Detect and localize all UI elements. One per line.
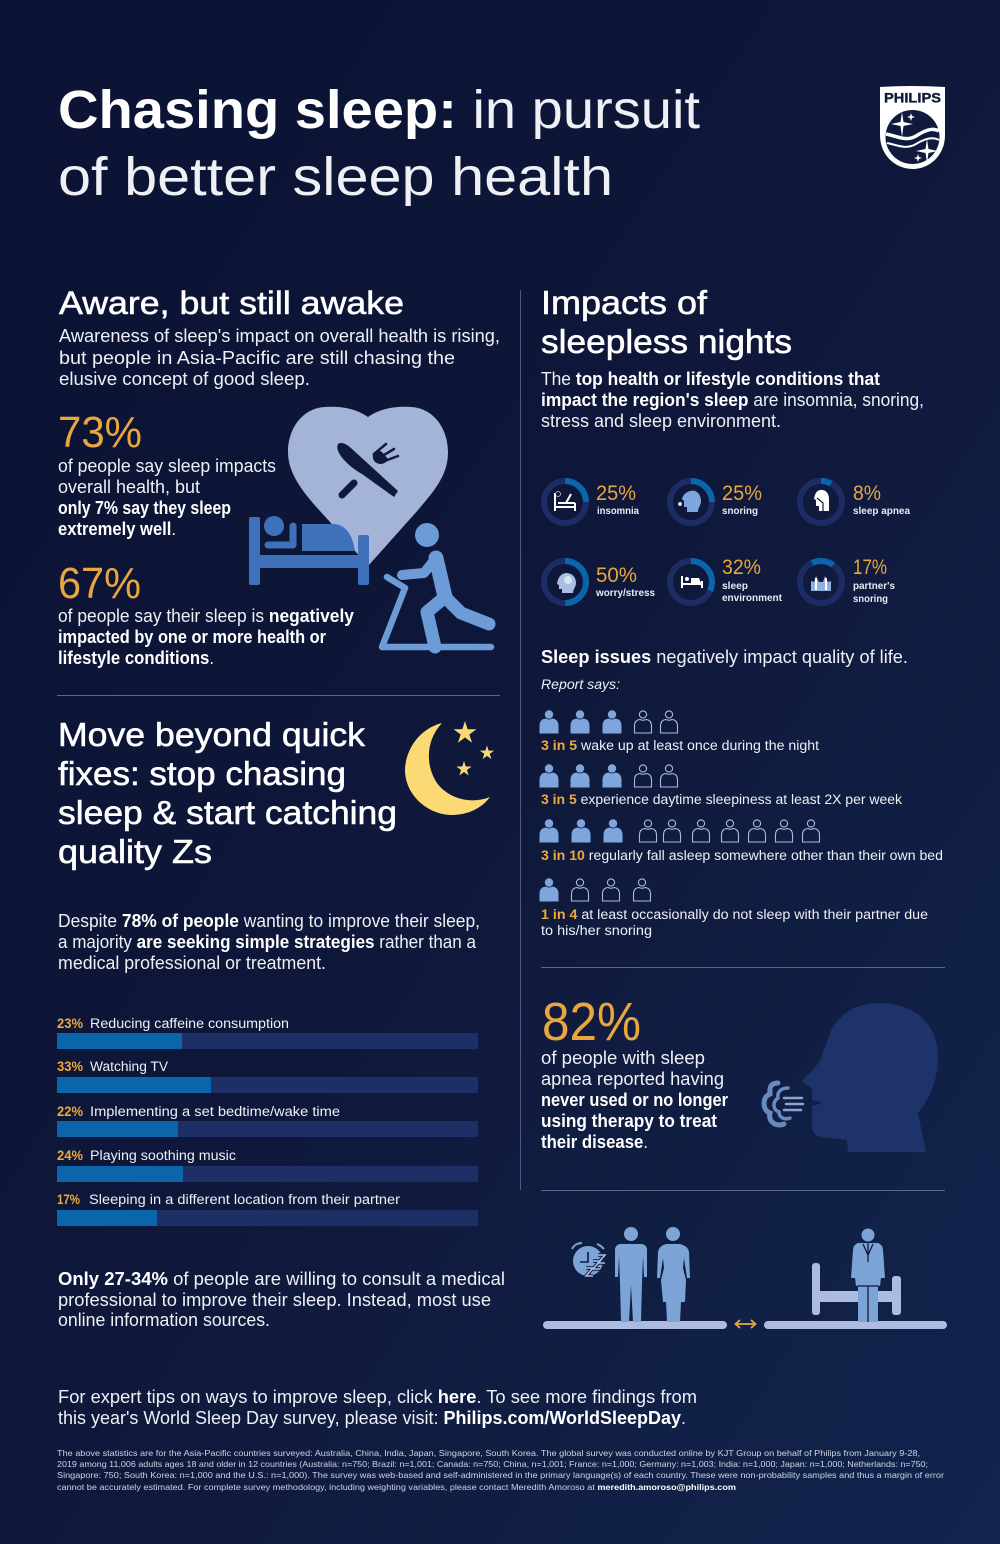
bar chart: sleep strategies [57,1016,478,1226]
bar: 33% TV [57,1059,478,1093]
pictogram: 3 in 5 daytime sleepiness [540,764,902,807]
donut: sleep environment 32%: sleep [722,580,748,592]
text: call to action: this year's World Sleep Day survey, please visit: Philips.com/WorldSleepDay. [58,1408,686,1428]
bar: 33% TV: 33% [57,1059,83,1074]
label: report says: Report says: [541,677,620,692]
divider: right column upper [541,967,945,968]
stat: 73%: extremely well. [58,519,176,539]
text: simple strategies: medical professional or treatment. [58,953,326,973]
stat: 67% [58,559,354,668]
text: call to action: For expert tips on ways to improve sleep, click here. To see more findings from [58,1387,697,1407]
stat: 73%: of people say sleep impacts [58,456,276,476]
footnote: cannot be accurately estimated. For complete survey methodology, including weighting variables, please contact Meredith Amoroso at meredith.amoroso@philips.com [57,1482,736,1492]
logo: Philips shield: PHILIPS [884,90,941,106]
text: simple strategies [58,911,480,973]
heading: move beyond quick fixes [58,716,397,870]
donut: sleep environment 32%: environment [722,592,782,604]
footnote: 2019 among 11,006 adults ages 18 and older in 12 countries (Australia: n=750; Brazil: n=1,001; Canada: n=750; China, n=1,001; France: n=1,000; Germany: n=1,003; India: n=1,000; Japan: n=1,000; Netherlands: n=750; [57,1459,928,1469]
bar: 22% bedtime: 22% [57,1104,83,1119]
arrow: double-headed [736,1320,756,1328]
intro text: impacts: stress and sleep environment. [541,411,781,431]
heading: move beyond quick fixes: Move beyond quick [58,716,366,753]
icon: breath cloud [764,1083,803,1125]
platform: left [543,1321,727,1329]
panel: impacts of sleepless nights [540,284,943,938]
text: sleep apnea therapy [541,1048,728,1152]
footnote [57,1448,944,1492]
icon: doctor [851,1228,885,1322]
bar: 22% bedtime [57,1104,478,1137]
icon: moon and stars [405,721,494,815]
donut: sleep environment 32%: 32% [722,556,761,579]
icon: head silhouette [802,1003,938,1152]
bar: 23% caffeine: 23% [57,1016,83,1031]
pictogram: 3 in 5 wake up: 3 in 5 wake up at least once during the night [541,738,819,753]
stat: 73%: 73% [58,408,142,457]
intro text: but people in Asia-Pacific are still chasing the [59,348,455,368]
stat: 67%: lifestyle conditions. [58,648,214,668]
bar: 24% music: 24% [57,1148,83,1163]
pictogram: 1 in 4 partner snoring: 1 in 4 at least occasionally do not sleep with their partner due [541,907,928,922]
donut: insomnia 25%: 25% [596,482,636,505]
bar: 17% different location: 17% [57,1192,80,1207]
pictogram: 3 in 10 fall asleep elsewhere: 3 in 10 regularly fall asleep somewhere other than their own bed [541,848,943,863]
title: Chasing sleep: in pursuit [58,80,700,140]
donut: insomnia 25% [544,481,639,523]
stat: 82%: 82% [542,992,641,1052]
donut: worry/stress 50%: 50% [596,564,637,587]
icon: man [615,1227,647,1322]
heading: impacts: Impacts of [541,284,708,321]
bar: 24% music [57,1148,478,1182]
text: simple strategies: Despite 78% of people wanting to improve their sleep, [58,911,480,931]
text: call to action [58,1387,697,1428]
text: sleep apnea therapy: apnea reported having [541,1069,724,1089]
donut: insomnia 25%: insomnia [597,505,639,517]
bar: 24% music: Playing soothing music [90,1148,236,1163]
text: simple strategies: a majority are seeking simple strategies rather than a [58,932,477,952]
stat: 67%: of people say their sleep is negatively [58,606,354,626]
intro text [59,326,500,389]
panel: move beyond quick fixes [57,716,505,1330]
footnote: Singapore: 750; South Korea: n=1,000 and the U.S.: n=1,000). The survey was web-based and self-administered in the primary language(s) of each country. These were non-probability samples and thus a margin of error [57,1470,944,1480]
pictogram: 3 in 5 daytime sleepiness: 3 in 5 experience daytime sleepiness at least 2X per week [541,792,902,807]
intro text: impacts: impact the region's sleep are insomnia, snoring, [541,390,924,410]
heading: move beyond quick fixes: quality Zs [58,833,212,870]
intro text: impacts [541,369,924,431]
donut: snoring 25%: 25% [722,482,762,505]
text: sleep apnea therapy: never used or no longer [541,1090,728,1110]
icon: woman [657,1227,690,1322]
donut: sleep apnea 8% [800,481,910,523]
panel: aware, but still awake [58,285,500,668]
icon: bed with sleeper [249,516,369,585]
icon: alarm clock with Zs [572,1243,605,1276]
intro text: Awareness of sleep's impact on overall health is rising, [59,326,500,346]
donut: worry/stress 50% [544,561,655,603]
divider: vertical center [520,290,521,1190]
heading: sleep issues: Sleep issues negatively impact quality of life. [541,647,908,667]
donut: sleep environment 32% [670,556,782,604]
donut: snoring 25% [670,481,762,523]
icon: hospital bed [812,1263,901,1315]
icon: person on treadmill [382,523,491,647]
heading: impacts: sleepless nights [541,323,792,360]
panel: patient and doctor illustration [543,1227,947,1329]
text: consult a medical professional: online information sources. [58,1310,270,1330]
icon: heart with knife and fork [288,407,448,566]
text: consult a medical professional: Only 27-34% of people are willing to consult a medical [58,1269,505,1289]
stat: 73%: only 7% say they sleep [58,498,231,518]
heading: aware: Aware, but still awake [59,285,404,321]
text: consult a medical professional: professional to improve their sleep. Instead, most use [58,1290,491,1310]
text: consult a medical professional [58,1269,505,1330]
stat: 73% [58,408,276,539]
bar: 33% TV: Watching TV [90,1059,168,1074]
donut: worry/stress 50%: worry/stress [595,587,655,599]
bar: 23% caffeine [57,1016,478,1049]
donut: partner's snoring 17% [793,554,895,610]
stat: 73%: overall health, but [58,477,200,497]
donut: partner's snoring 17%: partner's [853,580,895,592]
divider: left column [57,695,500,696]
text: sleep apnea therapy: their disease. [541,1132,648,1152]
pictogram: 1 in 4 partner snoring: to his/her snoring [541,923,652,938]
donut: snoring 25%: snoring [722,505,758,517]
text: sleep apnea therapy: of people with sleep [541,1048,705,1068]
heading: impacts [541,284,792,360]
title [58,80,700,207]
donut: sleep apnea 8%: sleep apnea [853,505,910,517]
heading: move beyond quick fixes: sleep & start catching [58,794,397,831]
footnote: The above statistics are for the Asia-Pacific countries surveyed: Australia, China, India, Japan, Singapore, South Korea. The global survey was conducted online by KJT Group on behalf of Philips from January 9-28, [57,1448,920,1458]
divider: right column lower [541,1190,945,1191]
stat: 67%: impacted by one or more health or [58,627,326,647]
bar: 22% bedtime: Implementing a set bedtime/wake time [90,1104,340,1119]
donut: partner's snoring 17%: snoring [853,593,888,605]
intro text: elusive concept of good sleep. [59,369,310,389]
bar: 17% different location [57,1192,478,1226]
donut: sleep apnea 8%: 8% [853,482,881,505]
bar: 23% caffeine: Reducing caffeine consumption [90,1016,289,1031]
donut: partner's snoring 17%: 17% [853,556,887,579]
platform: right [764,1321,947,1329]
text: sleep apnea therapy: using therapy to treat [541,1111,717,1131]
pictogram: 3 in 5 wake up [540,710,819,753]
title: of better sleep health [58,147,613,207]
intro text: impacts: The top health or lifestyle conditions that [541,369,880,389]
logo: Philips shield [880,86,945,169]
heading: move beyond quick fixes: fixes: stop chasing [58,755,346,792]
panel: 82% sleep apnea [541,992,938,1152]
pictogram: 1 in 4 partner snoring [540,878,928,938]
bar: 17% different location: Sleeping in a different location from their partner [89,1192,401,1207]
pictogram: 3 in 10 fall asleep elsewhere [540,819,943,863]
stat: 67%: 67% [58,559,141,608]
